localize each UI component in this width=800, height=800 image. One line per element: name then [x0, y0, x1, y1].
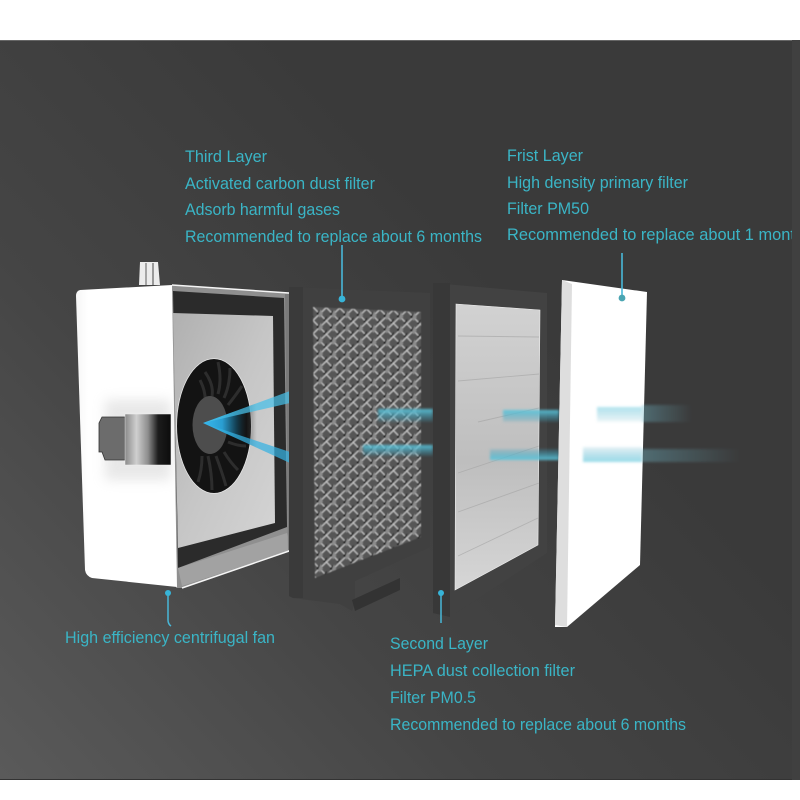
HEPA pleats	[455, 304, 540, 590]
text block: first layer: Frist Layer	[507, 147, 583, 165]
leader line: second layer	[438, 590, 444, 623]
text block: first layer: High density primary filter	[507, 174, 688, 192]
panel: first layer primary filter	[555, 280, 740, 627]
knob: top connector	[139, 262, 160, 285]
text block: third layer: Recommended to replace about 6 months	[185, 228, 482, 246]
shading around clip	[105, 400, 171, 480]
text block: third layer: Activated carbon dust filter	[185, 175, 375, 193]
text block: first layer: Filter PM50	[507, 200, 589, 218]
text block: second layer	[390, 635, 686, 734]
text block: second layer: Second Layer	[390, 635, 488, 653]
text block: third layer: Adsorb harmful gases	[185, 201, 340, 219]
leader line: first layer	[619, 253, 625, 301]
clip latch	[99, 414, 171, 465]
text block: second layer: Filter PM0.5	[390, 689, 476, 707]
carbon mesh	[313, 307, 421, 578]
text block: fan: High efficiency centrifugal fan	[65, 629, 275, 647]
text block: second layer: HEPA dust collection filter	[390, 662, 575, 680]
panel: third layer activated carbon filter	[289, 287, 433, 611]
housing white side face	[76, 285, 177, 587]
airflow cone	[203, 391, 290, 463]
housing interior	[172, 285, 292, 588]
airflow bars on carbon filter	[363, 409, 433, 456]
fan housing unit	[76, 262, 292, 588]
icon: centrifugal fan	[176, 358, 252, 494]
leader line: third layer	[339, 245, 345, 302]
leader line: fan	[165, 590, 171, 626]
airflow bars through primary filter	[583, 405, 740, 462]
text block: first layer	[507, 147, 800, 244]
text block: second layer: Recommended to replace about 6 months	[390, 716, 686, 734]
panel: second layer HEPA filter	[433, 283, 559, 617]
airflow bars on HEPA filter	[490, 410, 559, 460]
text block: third layer: Third Layer	[185, 148, 267, 166]
text block: third layer	[185, 148, 482, 246]
text block: first layer: Recommended to replace about 1 month	[507, 226, 800, 244]
